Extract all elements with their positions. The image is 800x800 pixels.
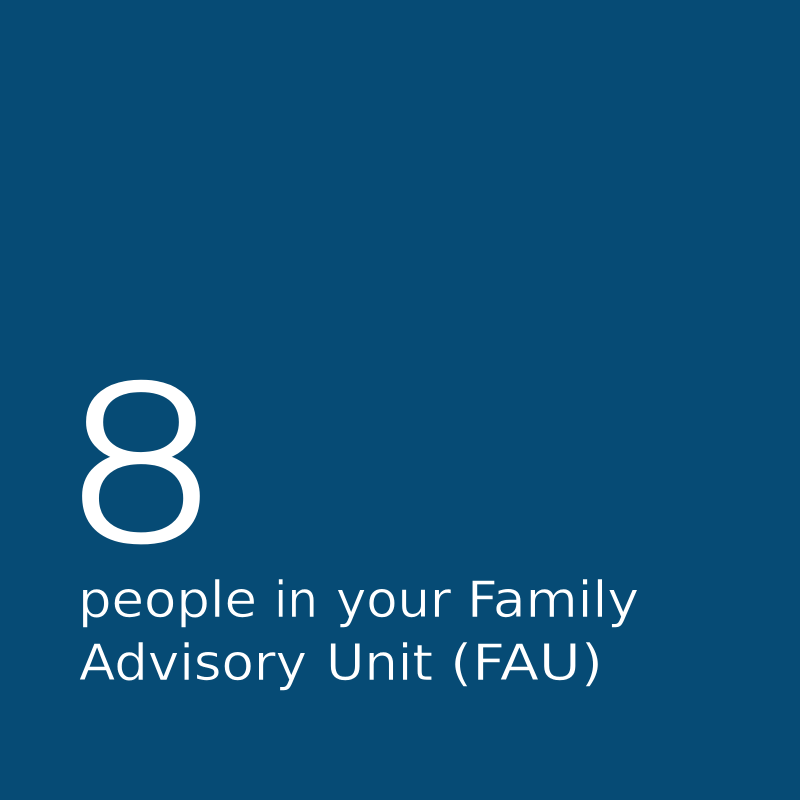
caption line 2: (FAU): [450, 634, 603, 692]
caption line 1: [78, 571, 639, 629]
caption line 1: your: [336, 571, 451, 629]
caption line 2: Unit: [326, 634, 433, 692]
caption line 1: in: [274, 571, 318, 629]
caption line 2: Advisory: [79, 634, 307, 692]
caption line 1: Family: [467, 571, 639, 629]
caption line 2: [79, 634, 603, 692]
caption line 1: people: [78, 571, 257, 629]
big number 8: 8: [60, 343, 222, 590]
caption: [78, 571, 639, 692]
